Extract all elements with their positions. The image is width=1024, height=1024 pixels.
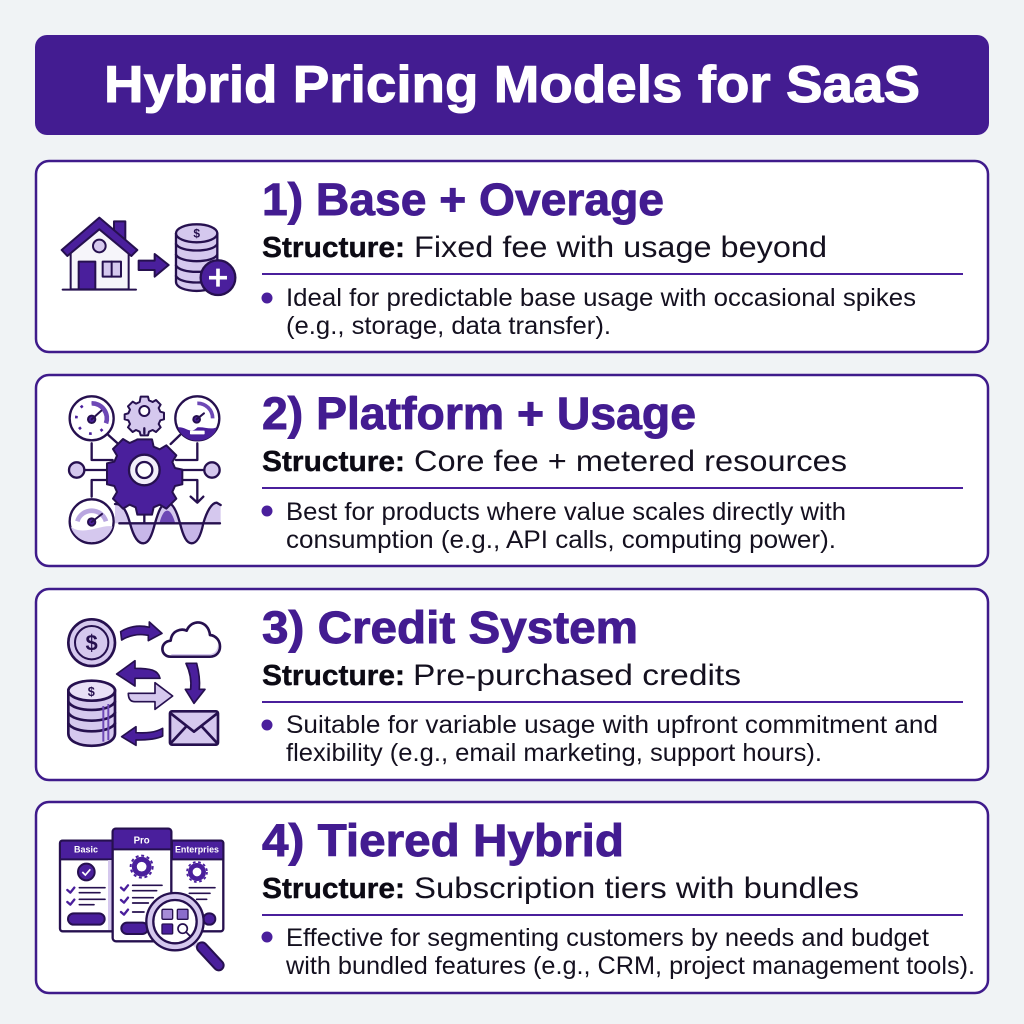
bullet text [262, 711, 938, 767]
panel: tiered hybrid [36, 802, 988, 993]
panel: base + overage [36, 161, 988, 352]
structure line: Structure: [262, 446, 405, 478]
title banner: Hybrid Pricing Models for SaaS [104, 56, 920, 114]
structure line: Structure: [262, 873, 405, 905]
icon: pricing tier cards with magnifier [60, 829, 223, 965]
heading: 1) Base + Overage [262, 174, 664, 225]
bullet text [262, 284, 916, 340]
bullet text: (e.g., storage, data transfer). [286, 312, 611, 340]
panel: credit system [36, 589, 988, 780]
structure line [262, 659, 741, 692]
bullet text: flexibility (e.g., email marketing, support hours). [286, 739, 822, 767]
icon: coin, cloud, envelope and stack cycle: $ [88, 685, 95, 699]
structure line: Structure: [262, 232, 405, 264]
structure line: Subscription tiers with bundles [414, 872, 859, 905]
bullet text [262, 498, 846, 554]
structure line: Pre-purchased credits [413, 659, 741, 692]
bullet text [262, 924, 975, 980]
bullet text: consumption (e.g., API calls, computing power). [286, 526, 836, 554]
panel: platform + usage [36, 375, 988, 566]
structure line: Fixed fee with usage beyond [414, 231, 827, 264]
title banner [35, 35, 989, 135]
icon: coin, cloud, envelope and stack cycle: $ [86, 631, 98, 656]
structure line [262, 231, 827, 264]
heading: 4) Tiered Hybrid [262, 815, 624, 866]
bullet text: Best for products where value scales directly with [286, 498, 846, 526]
structure line: Structure: [262, 660, 405, 692]
icon: house to coin stack with plus [62, 218, 235, 295]
bullet text: with bundled features (e.g., CRM, project management tools). [285, 952, 975, 980]
bullet text: Suitable for variable usage with upfront commitment and [286, 711, 938, 739]
icon: pricing tier cards with magnifier: Basic [74, 845, 98, 855]
icon: pricing tier cards with magnifier: Enterpries [175, 845, 219, 855]
bullet text: Effective for segmenting customers by needs and budget [286, 924, 929, 952]
icon: house to coin stack with plus: $ [193, 227, 200, 241]
icon: coin, cloud, envelope and stack cycle [68, 619, 220, 746]
heading: 2) Platform + Usage [262, 388, 696, 439]
structure line [262, 445, 847, 478]
icon: gauges, gear and usage wave [69, 396, 221, 543]
icon: pricing tier cards with magnifier: Pro [134, 835, 150, 846]
structure line [262, 872, 859, 905]
structure line: Core fee + metered resources [414, 445, 847, 478]
heading: 3) Credit System [262, 602, 638, 653]
bullet text: Ideal for predictable base usage with occasional spikes [286, 284, 916, 312]
